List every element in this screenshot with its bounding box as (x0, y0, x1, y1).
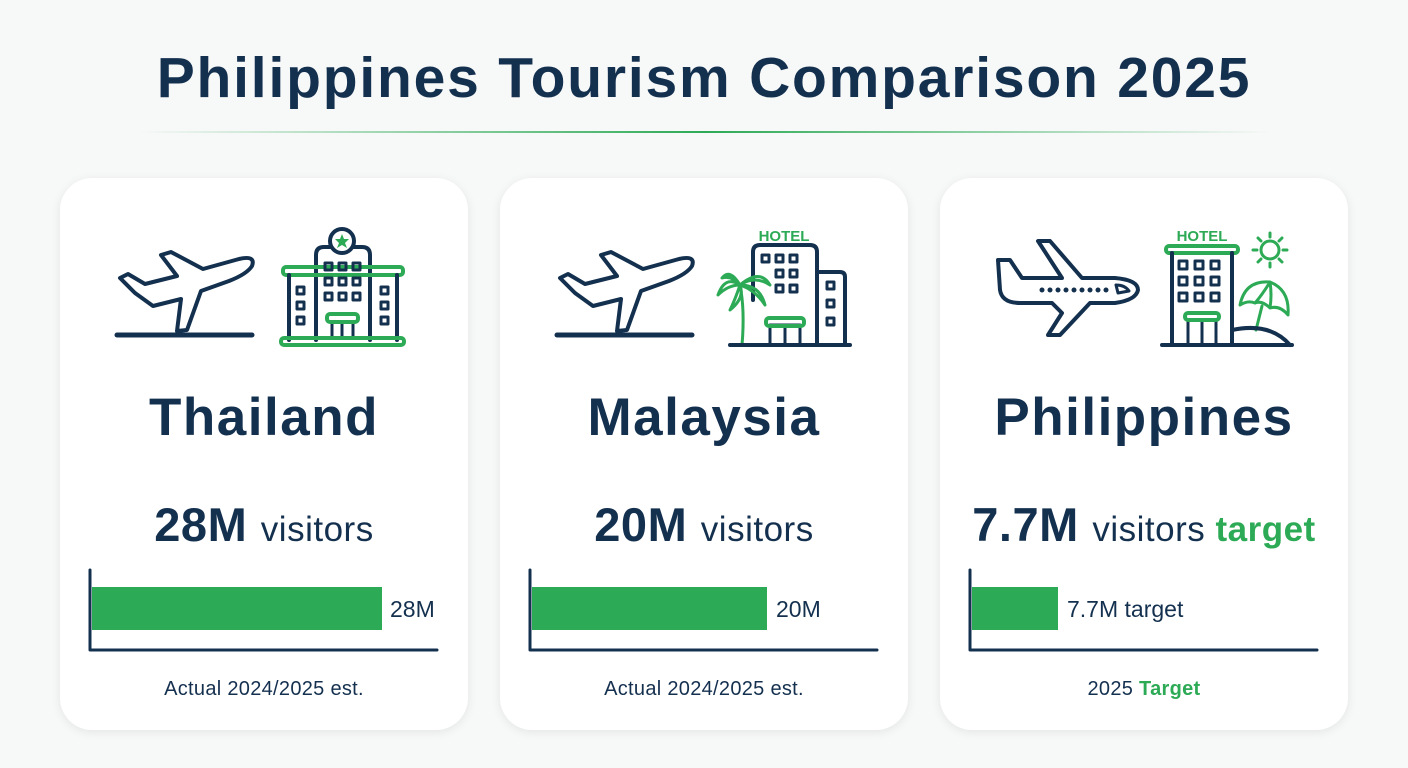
bar chart: Thailand: 28M (390, 596, 435, 622)
stat: Malaysia visitors: 20M visitors (594, 498, 814, 551)
icon: hotel with beach Philippines: HOTEL (1177, 228, 1227, 245)
title: Philippines Tourism Comparison 2025 (157, 46, 1251, 110)
caption: Philippines: 2025 Target (1087, 678, 1200, 700)
icon: hotel with palm Malaysia (718, 228, 850, 345)
bar chart: Malaysia: 20M (776, 596, 821, 622)
icon: hotel with palm Malaysia: HOTEL (759, 228, 809, 245)
bar chart: Philippines: 7.7M target (1067, 596, 1184, 622)
stat: Thailand visitors: 28M visitors (154, 498, 374, 551)
icon: takeoff plane Thailand (117, 252, 253, 335)
stat: Philippines visitors target: 7.7M visitors target (972, 498, 1316, 551)
caption: Thailand: Actual 2024/2025 est. (164, 678, 364, 700)
heading: Thailand: Thailand (149, 388, 379, 447)
heading: Philippines: Philippines (994, 388, 1294, 447)
bar chart: Malaysia (530, 570, 877, 650)
caption: Malaysia: Actual 2024/2025 est. (604, 678, 804, 700)
bar chart: Philippines (970, 570, 1317, 650)
heading: Malaysia: Malaysia (588, 388, 820, 447)
bar chart: Thailand (90, 570, 437, 650)
panel: Malaysia (500, 178, 908, 730)
icon: hotel with beach Philippines (1162, 228, 1292, 345)
icon: airplane Philippines (998, 241, 1138, 335)
panel: Thailand (60, 178, 468, 730)
icon: takeoff plane Malaysia (557, 252, 693, 335)
icon: hotel Thailand (281, 229, 404, 345)
panel: Philippines (940, 178, 1348, 730)
